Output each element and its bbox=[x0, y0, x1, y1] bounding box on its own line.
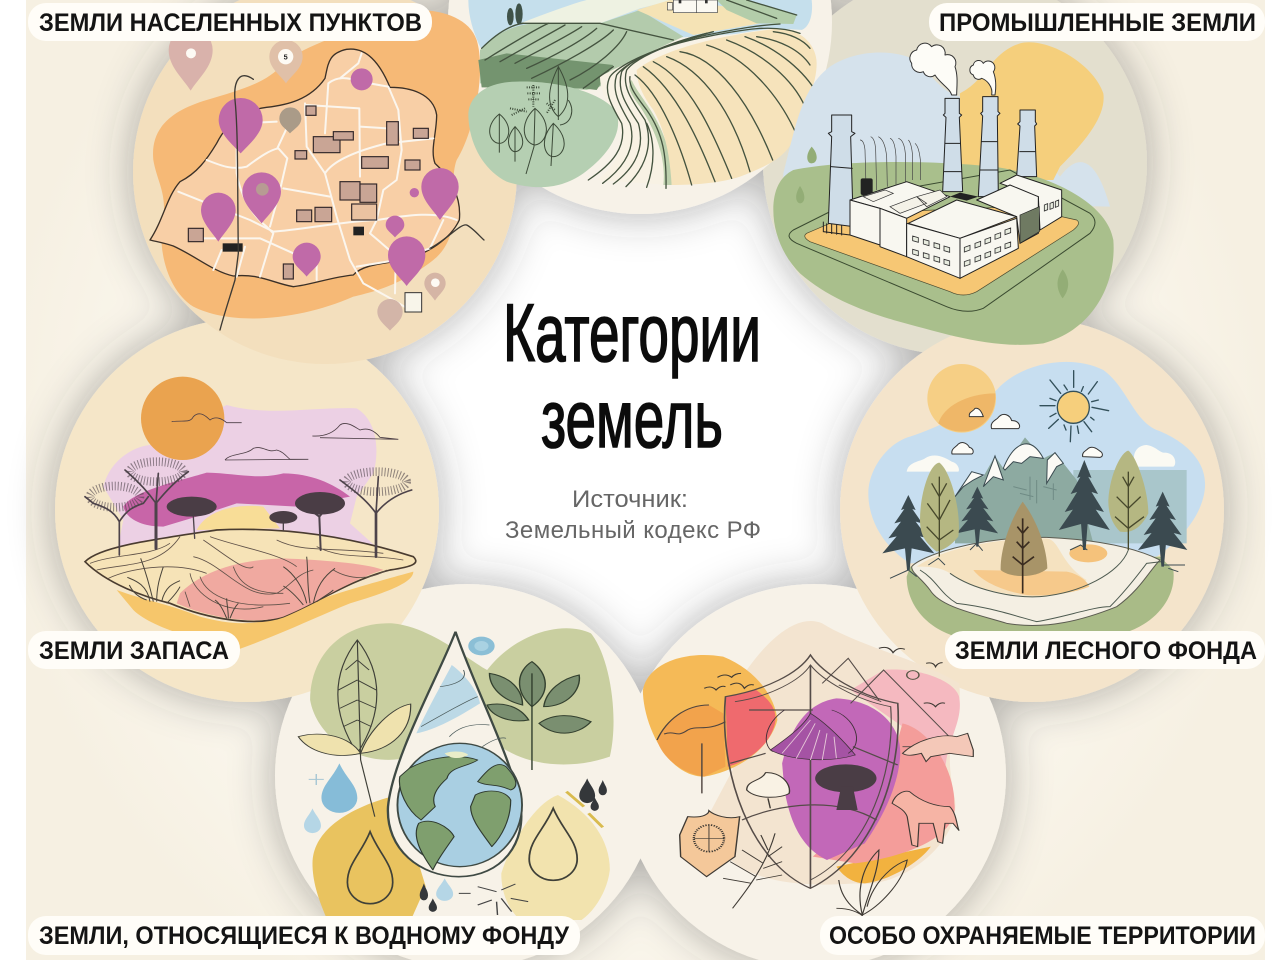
sun bbox=[1040, 371, 1109, 442]
label: industrial: ПРОМЫШЛЕННЫЕ ЗЕМЛИ bbox=[939, 9, 1256, 37]
panel: forest illustration bbox=[868, 362, 1205, 640]
central title bbox=[503, 288, 761, 465]
panel: reserve lands illustration bbox=[85, 377, 416, 650]
panel: agricultural illustration bbox=[468, 0, 817, 188]
shield bbox=[725, 655, 959, 888]
pale pins bbox=[169, 28, 446, 331]
acacia bbox=[815, 764, 877, 810]
birds bbox=[704, 647, 945, 707]
fan canopy bbox=[770, 713, 855, 760]
savanna trees bbox=[85, 470, 412, 557]
big water drop bbox=[388, 632, 522, 877]
farmhouse bbox=[667, 0, 717, 13]
round tree bbox=[747, 773, 790, 808]
label: water fund: ЗЕМЛИ, ОТНОСЯЩИЕСЯ К ВОДНОМУ ФОНДУ bbox=[39, 922, 569, 950]
chimneys bbox=[823, 97, 1037, 235]
contour lines bbox=[90, 537, 403, 609]
fox bbox=[902, 733, 973, 762]
central title: Категории bbox=[503, 288, 761, 379]
clouds bbox=[969, 408, 983, 417]
pale pins: 5 bbox=[284, 52, 288, 61]
trees bbox=[882, 460, 1187, 570]
small drops bbox=[304, 763, 607, 912]
label: protected territories bbox=[820, 916, 1265, 955]
central title: земель bbox=[541, 374, 723, 465]
source note: Земельный кодекс РФ bbox=[505, 517, 761, 544]
mountains bbox=[1073, 470, 1187, 543]
smoke clouds bbox=[910, 43, 957, 95]
map houses bbox=[188, 106, 428, 312]
factory buildings bbox=[850, 175, 1062, 278]
source note: Источник: bbox=[572, 486, 688, 513]
mountain hill bbox=[657, 705, 725, 793]
label: forest fund bbox=[945, 631, 1265, 669]
panel: protected territories illustration bbox=[643, 621, 973, 918]
emblem bbox=[680, 811, 740, 877]
field lines bbox=[482, 0, 815, 188]
label: settlements: ЗЕМЛИ НАСЕЛЕННЫХ ПУНКТОВ bbox=[39, 9, 422, 37]
panel: settlements illustration bbox=[150, 10, 484, 331]
map roads bbox=[178, 53, 457, 310]
leaves right bbox=[487, 662, 591, 770]
source note bbox=[505, 486, 761, 544]
leaves left bbox=[298, 640, 411, 817]
label: reserve lands: ЗЕМЛИ ЗАПАСА bbox=[39, 637, 229, 665]
grasses bbox=[127, 557, 335, 618]
ground bbox=[907, 557, 1174, 640]
pipes bbox=[860, 137, 921, 190]
outline road line bbox=[220, 76, 253, 330]
label: reserve lands bbox=[28, 631, 240, 669]
panel: water fund illustration bbox=[298, 623, 614, 920]
map pins bbox=[201, 68, 459, 286]
fern and plant bbox=[723, 833, 782, 908]
horse bbox=[892, 791, 959, 847]
panel: industrial illustration bbox=[773, 42, 1114, 345]
trees bbox=[490, 67, 572, 174]
label: protected territories: ОСОБО ОХРАНЯЕМЫЕ ТЕРРИТОРИИ bbox=[829, 922, 1256, 950]
label: forest fund: ЗЕМЛИ ЛЕСНОГО ФОНДА bbox=[955, 637, 1257, 665]
label: water fund bbox=[28, 916, 580, 955]
clouds bbox=[172, 414, 398, 460]
